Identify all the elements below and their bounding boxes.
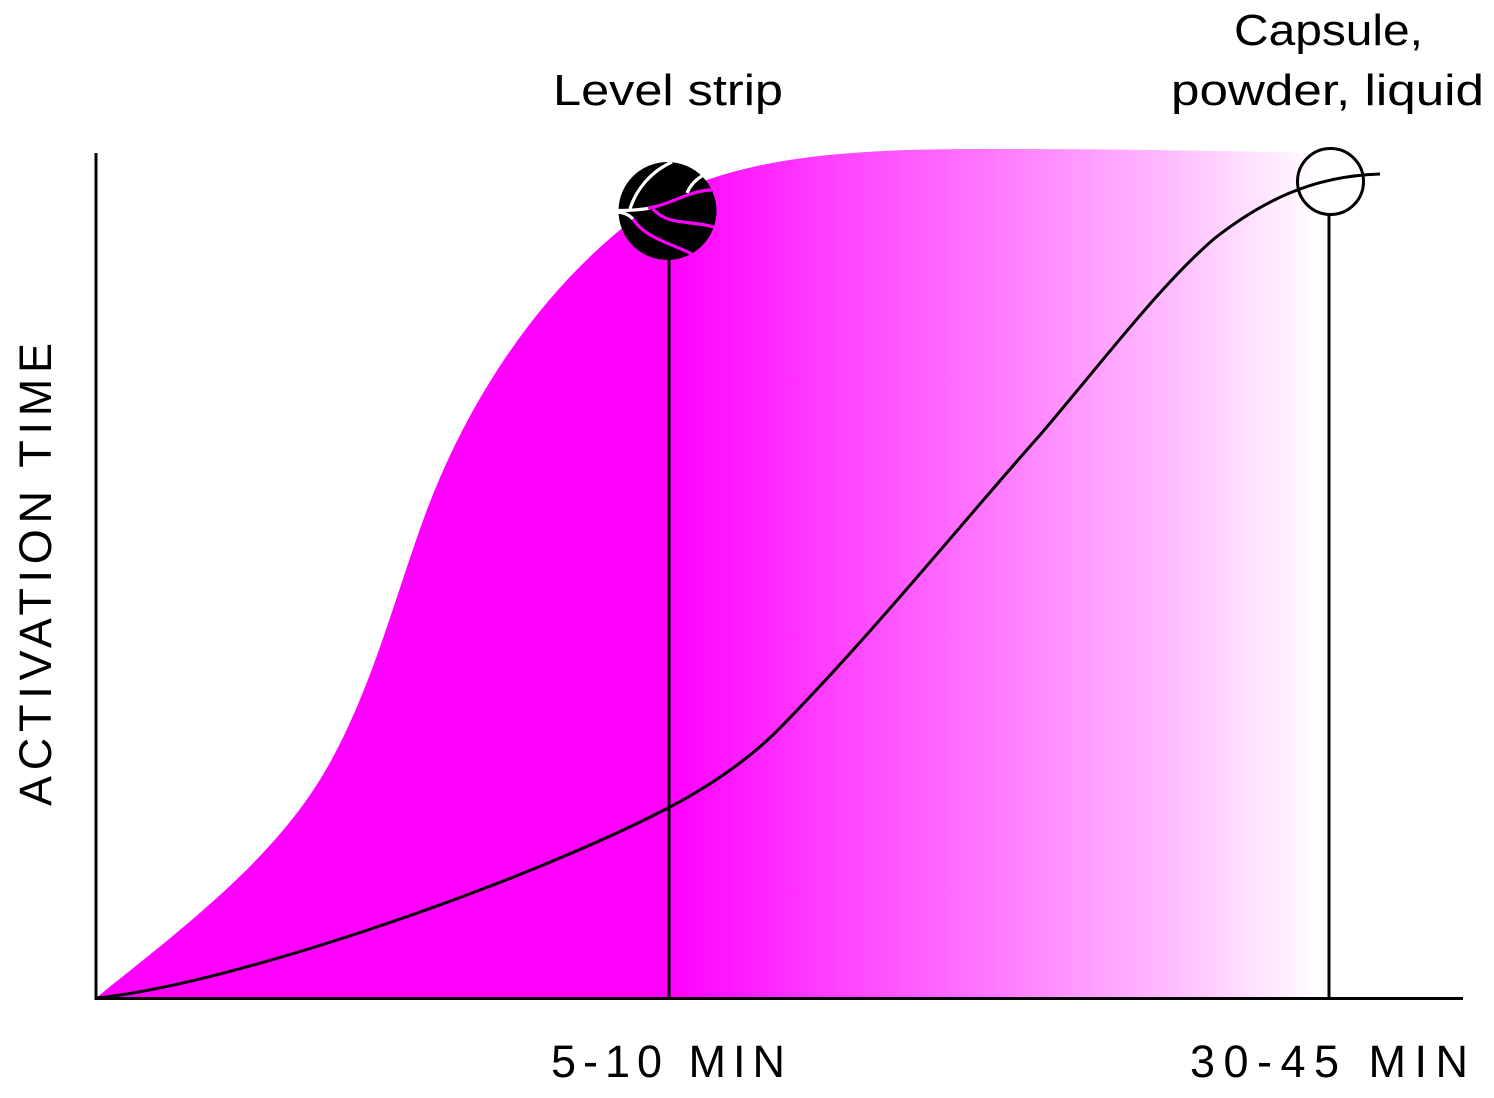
marker line: 5-10 min — [668, 250, 670, 998]
label: capsule, powder, liquid — [1171, 6, 1484, 115]
label: capsule, powder, liquid: powder, liquid — [1171, 66, 1484, 115]
x label: 5-10 min: 5-10 MIN — [551, 1036, 785, 1087]
label: capsule, powder, liquid: Capsule, — [1234, 6, 1423, 55]
icon: level strip ball — [618, 162, 716, 260]
x axis — [95, 997, 1463, 1000]
marker line: 30-45 min — [1328, 214, 1330, 998]
y axis title: ACTIVATION TIME — [10, 343, 61, 806]
label: level strip: Level strip — [553, 66, 783, 115]
x label: 30-45 min: 30-45 MIN — [1190, 1036, 1468, 1087]
shaded area: level strip curve — [96, 149, 1320, 998]
curve: capsule, powder, liquid — [96, 174, 1380, 998]
marker: capsule circle — [1298, 148, 1364, 214]
y axis — [94, 153, 98, 1000]
